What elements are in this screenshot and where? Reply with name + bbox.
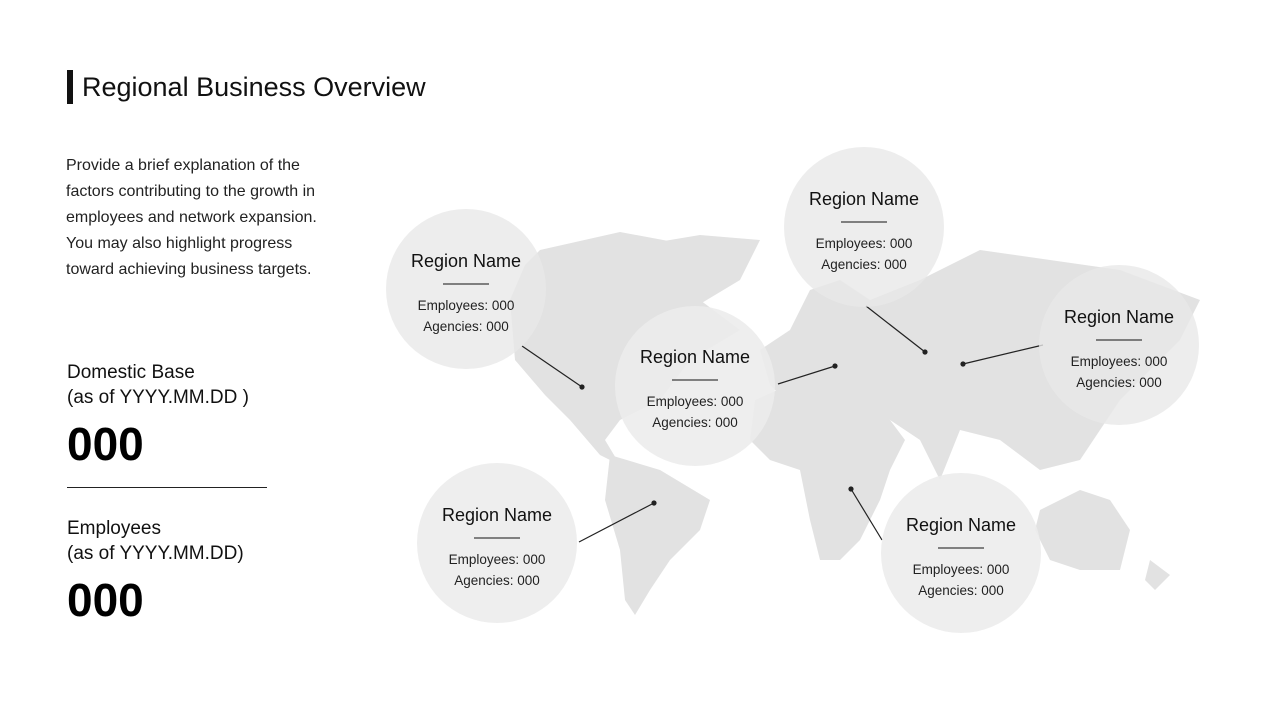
stat: employees: (as of YYYY.MM.DD) xyxy=(67,543,244,564)
callout: region 3: Agencies: 000 xyxy=(1076,375,1162,390)
description text: toward achieving business targets. xyxy=(66,261,311,278)
stat: employees: 000 xyxy=(67,574,144,626)
title: Regional Business Overview xyxy=(82,72,426,102)
callout: region 1: Region Name xyxy=(411,251,521,271)
callout: region 5: Agencies: 000 xyxy=(454,573,540,588)
callout: region 6 xyxy=(881,473,1041,633)
callout: region 4: Agencies: 000 xyxy=(652,415,738,430)
callout: region 2 xyxy=(784,147,944,307)
description text: Provide a brief explanation of the xyxy=(66,157,300,174)
callout: region 5: Employees: 000 xyxy=(449,552,545,567)
connector lines xyxy=(522,306,1043,542)
map continents xyxy=(510,232,1200,615)
callout: region 5: Region Name xyxy=(442,505,552,525)
callout: region 3: Employees: 000 xyxy=(1071,354,1167,369)
callout: region 4: Region Name xyxy=(640,347,750,367)
description text: employees and network expansion. xyxy=(66,209,317,226)
callout: region 4: Employees: 000 xyxy=(647,394,743,409)
stat: domestic base: 000 xyxy=(67,418,144,470)
callout: region 6: Agencies: 000 xyxy=(918,583,1004,598)
callout: region 1 xyxy=(386,209,546,369)
description text xyxy=(66,157,317,278)
callout: region 2: Region Name xyxy=(809,189,919,209)
stat: domestic base: Domestic Base xyxy=(67,362,195,383)
callout: region 3: Region Name xyxy=(1064,307,1174,327)
callout: region 2: Agencies: 000 xyxy=(821,257,907,272)
stat: employees: Employees xyxy=(67,518,161,539)
stat: domestic base: (as of YYYY.MM.DD ) xyxy=(67,387,249,408)
callout: region 6: Region Name xyxy=(906,515,1016,535)
description text: You may also highlight progress xyxy=(66,235,292,252)
callout: region 1: Employees: 000 xyxy=(418,298,514,313)
callout: region 2: Employees: 000 xyxy=(816,236,912,251)
callout: region 5 xyxy=(417,463,577,623)
callout: region 4 xyxy=(615,306,775,466)
stat: employees xyxy=(67,518,244,626)
callout: region 3 xyxy=(1039,265,1199,425)
description text: factors contributing to the growth in xyxy=(66,183,315,200)
callout: region 6: Employees: 000 xyxy=(913,562,1009,577)
stat: domestic base xyxy=(67,362,249,470)
callout: region 1: Agencies: 000 xyxy=(423,319,509,334)
